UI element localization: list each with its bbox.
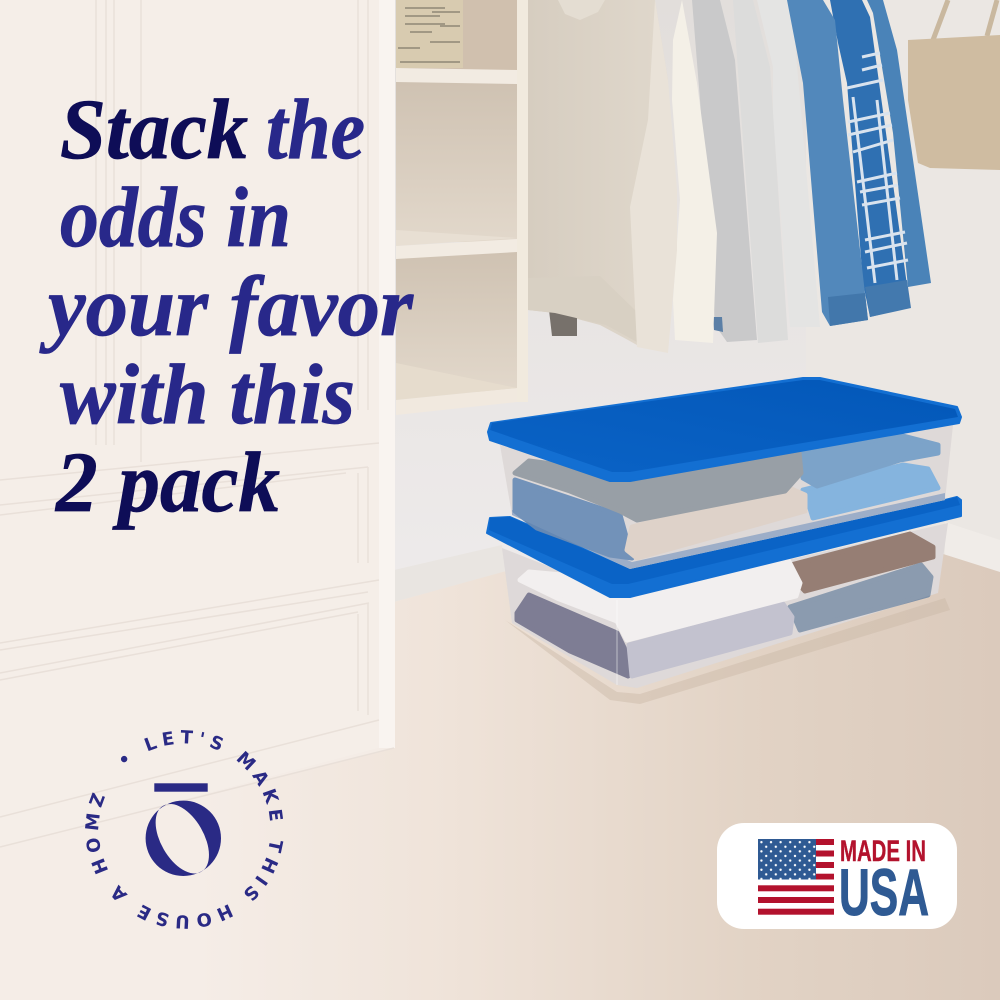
cream sweater [672,0,717,343]
denim shirt back [867,0,931,287]
light sweater 3 [757,0,820,327]
US flag [758,839,834,915]
headline: the [266,81,365,177]
headline: your favor [39,258,415,354]
blue lid: upper [488,378,961,481]
headline: Stack [60,81,248,177]
plaid shirt [830,0,911,317]
folded clothes: upper bin [515,436,938,558]
made in text: MADE IN [840,835,926,868]
logo mark [146,783,221,876]
made in USA badge [717,823,957,929]
headline: odds in [60,169,291,265]
hanging clothes [528,0,931,353]
headline: 2 pack [54,434,280,530]
wicker basket [396,0,463,68]
circular brand badge: • LET'S MAKE THIS HOUSE A HOMZ [85,730,284,929]
headline [39,81,415,530]
wardrobe cabinet [0,0,395,848]
upper storage bin [488,378,961,569]
tote bag [908,0,1000,170]
folded clothes: lower bin [517,534,933,676]
open shelving unit [396,0,528,415]
blue lid: lower [487,497,961,597]
speckled sweater [528,0,677,353]
lower storage bin [487,497,961,688]
grey sweater 1 [692,0,757,342]
denim shirt front [787,0,868,326]
grey sweater 2 [733,0,788,343]
headline: with this [60,346,355,442]
USA text: USA [839,855,929,929]
